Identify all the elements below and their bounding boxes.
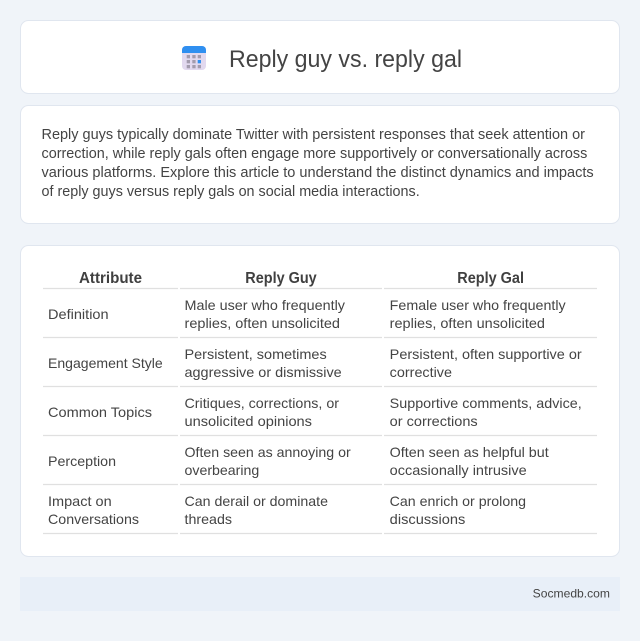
row: engagement style: Engagement Style [48, 355, 163, 371]
row: engagement style: aggressive or dismissive [184, 364, 342, 380]
row: definition [48, 297, 566, 331]
row: impact on conversations: discussions [390, 511, 465, 527]
row: definition: Female user who frequently [390, 297, 566, 313]
row: impact on conversations [48, 493, 526, 527]
row: impact on conversations: threads [184, 511, 232, 527]
table panel [20, 246, 620, 556]
row: impact on conversations: Can enrich or prolong [390, 493, 526, 509]
table header [79, 270, 524, 287]
row: definition: Male user who frequently [184, 297, 345, 313]
footer credit: Socmedb.com [533, 586, 610, 600]
icon: calendar [182, 46, 206, 70]
intro text [42, 127, 594, 200]
row: impact on conversations: Impact on [48, 493, 112, 509]
title: Reply guy vs. reply gal [229, 46, 462, 73]
row: engagement style: Persistent, often supportive or [390, 346, 582, 362]
row: definition: replies, often unsolicited [184, 315, 340, 331]
intro text: various platforms. Explore this article to understand the distinct dynamics and impacts [42, 165, 594, 181]
row: perception: Perception [48, 453, 116, 469]
row: definition: replies, often unsolicited [390, 315, 545, 331]
table header: Reply Guy [245, 270, 317, 287]
row: common topics: Supportive comments, advice, [390, 395, 582, 411]
intro panel [20, 106, 620, 224]
footer [20, 577, 620, 611]
row: engagement style [48, 346, 582, 380]
row: engagement style: Persistent, sometimes [184, 346, 327, 362]
row: perception: Often seen as helpful but [390, 444, 549, 460]
row: common topics: unsolicited opinions [184, 413, 312, 429]
row: impact on conversations: Can derail or dominate [184, 493, 328, 509]
table header: Reply Gal [457, 270, 524, 287]
header panel [20, 20, 620, 94]
row: perception: occasionally intrusive [390, 462, 527, 478]
row: perception: overbearing [184, 462, 259, 478]
row: engagement style: corrective [390, 364, 452, 380]
intro text: Reply guys typically dominate Twitter with persistent responses that seek attention or [42, 127, 585, 143]
row: common topics [48, 395, 582, 429]
row: common topics: Common Topics [48, 404, 152, 420]
row: perception [48, 444, 549, 478]
row: common topics: or corrections [390, 413, 478, 429]
table header: Attribute [79, 270, 142, 287]
intro text: of reply guys versus reply gals on social media interactions. [42, 184, 420, 200]
row: common topics: Critiques, corrections, or [184, 395, 339, 411]
intro text: correction, while reply gals often engage more supportively or conversationally across [42, 146, 587, 162]
row: impact on conversations: Conversations [48, 511, 139, 527]
row: perception: Often seen as annoying or [184, 444, 351, 460]
row: definition: Definition [48, 306, 109, 322]
